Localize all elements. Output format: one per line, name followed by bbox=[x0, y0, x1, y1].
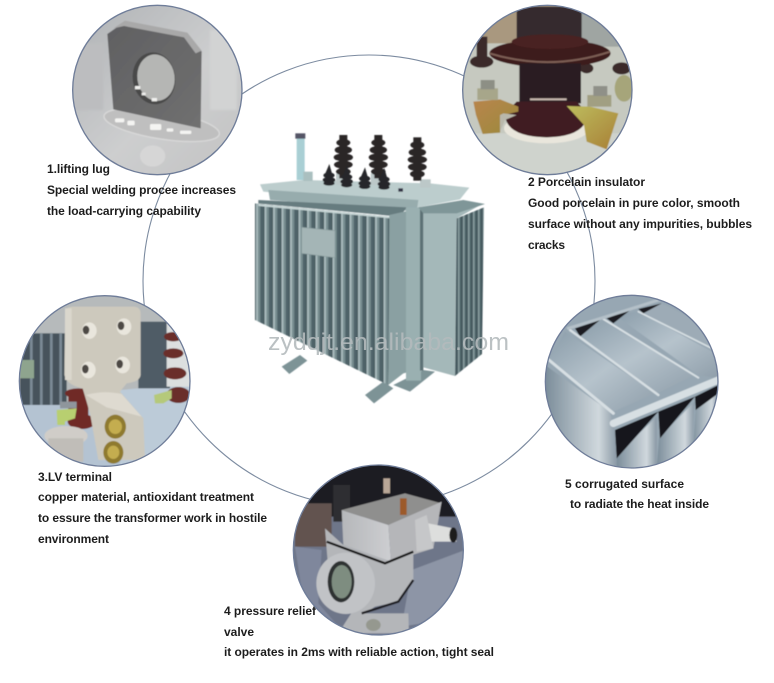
text: lifting lug: the load-carrying capability bbox=[47, 204, 201, 218]
nameplate bbox=[302, 227, 335, 258]
centre column bbox=[388, 207, 423, 385]
insulator body bbox=[517, 7, 582, 40]
tall bushings bbox=[334, 135, 427, 181]
circle 3: LV terminal photo bbox=[17, 293, 193, 470]
circle 4: pressure relief valve photo bbox=[292, 463, 468, 640]
side fins bbox=[453, 205, 485, 378]
lug hole bbox=[132, 52, 176, 104]
weld bead bbox=[104, 110, 220, 142]
circle 1: lifting lug photo bbox=[70, 3, 247, 180]
cap nut bbox=[44, 426, 88, 442]
text: porcelain insulator: surface without any impurities, bubbles bbox=[528, 217, 752, 231]
text: porcelain insulator: Good porcelain in pure color, smooth bbox=[528, 196, 740, 210]
brown insulators bbox=[163, 332, 190, 403]
lid and frame bbox=[260, 180, 469, 207]
text: porcelain insulator: cracks bbox=[528, 238, 565, 252]
text: corrugated surface: to radiate the heat inside bbox=[570, 497, 709, 511]
right panel bbox=[423, 203, 483, 376]
text: LV terminal: to essure the transformer work in hostile bbox=[38, 511, 267, 525]
watermark: zydqjt.en.alibaba.com bbox=[268, 329, 509, 356]
bushing hardware bbox=[336, 173, 431, 192]
black gaps bbox=[575, 320, 600, 337]
text: lifting lug: 1.lifting lug bbox=[47, 162, 110, 176]
circle 2: porcelain insulator photo bbox=[460, 3, 637, 180]
front fins bbox=[250, 200, 393, 390]
lower fins bbox=[545, 365, 617, 468]
text: lifting lug: Special welding procee increases bbox=[47, 183, 236, 197]
text: porcelain insulator: 2 Porcelain insulator bbox=[528, 175, 645, 189]
bolts bbox=[105, 415, 126, 439]
terminal holes bbox=[81, 318, 131, 378]
text: LV terminal: environment bbox=[38, 532, 109, 546]
lug plate bbox=[107, 22, 202, 128]
cable gland bbox=[415, 515, 433, 552]
connecting ring bbox=[143, 55, 595, 507]
background fins bbox=[20, 333, 67, 405]
green clips bbox=[57, 408, 77, 425]
valve body bbox=[325, 528, 413, 633]
text: pressure relief valve: valve bbox=[224, 625, 254, 639]
right clamp bbox=[567, 106, 618, 149]
round housing bbox=[316, 553, 375, 614]
text: LV terminal: 3.LV terminal bbox=[38, 470, 112, 484]
text: porcelain insulator bbox=[528, 175, 752, 252]
terminal plate bbox=[64, 307, 145, 460]
white rails bbox=[549, 299, 718, 423]
text: LV terminal: copper material, antioxidant treatment bbox=[38, 490, 254, 504]
text: pressure relief valve: it operates in 2ms with reliable action, tight seal bbox=[224, 645, 494, 659]
short bushings bbox=[323, 164, 390, 190]
transformer photo bbox=[250, 133, 485, 403]
text: corrugated surface bbox=[565, 477, 709, 511]
upper fins bbox=[558, 345, 642, 409]
junction box bbox=[342, 493, 442, 525]
text: pressure relief valve bbox=[224, 604, 494, 659]
text: lifting lug bbox=[47, 162, 236, 218]
text: corrugated surface: 5 corrugated surface bbox=[565, 477, 684, 491]
left clamp bbox=[473, 99, 518, 134]
circle 5: corrugated surface photo bbox=[542, 292, 722, 472]
text: LV terminal bbox=[38, 470, 267, 546]
text: pressure relief valve: 4 pressure relief bbox=[224, 604, 317, 618]
sensor stud bbox=[333, 485, 350, 522]
weld drop bbox=[140, 145, 165, 167]
oil gauge bbox=[297, 138, 305, 180]
feet bbox=[282, 355, 435, 403]
background insulators bbox=[470, 56, 493, 68]
